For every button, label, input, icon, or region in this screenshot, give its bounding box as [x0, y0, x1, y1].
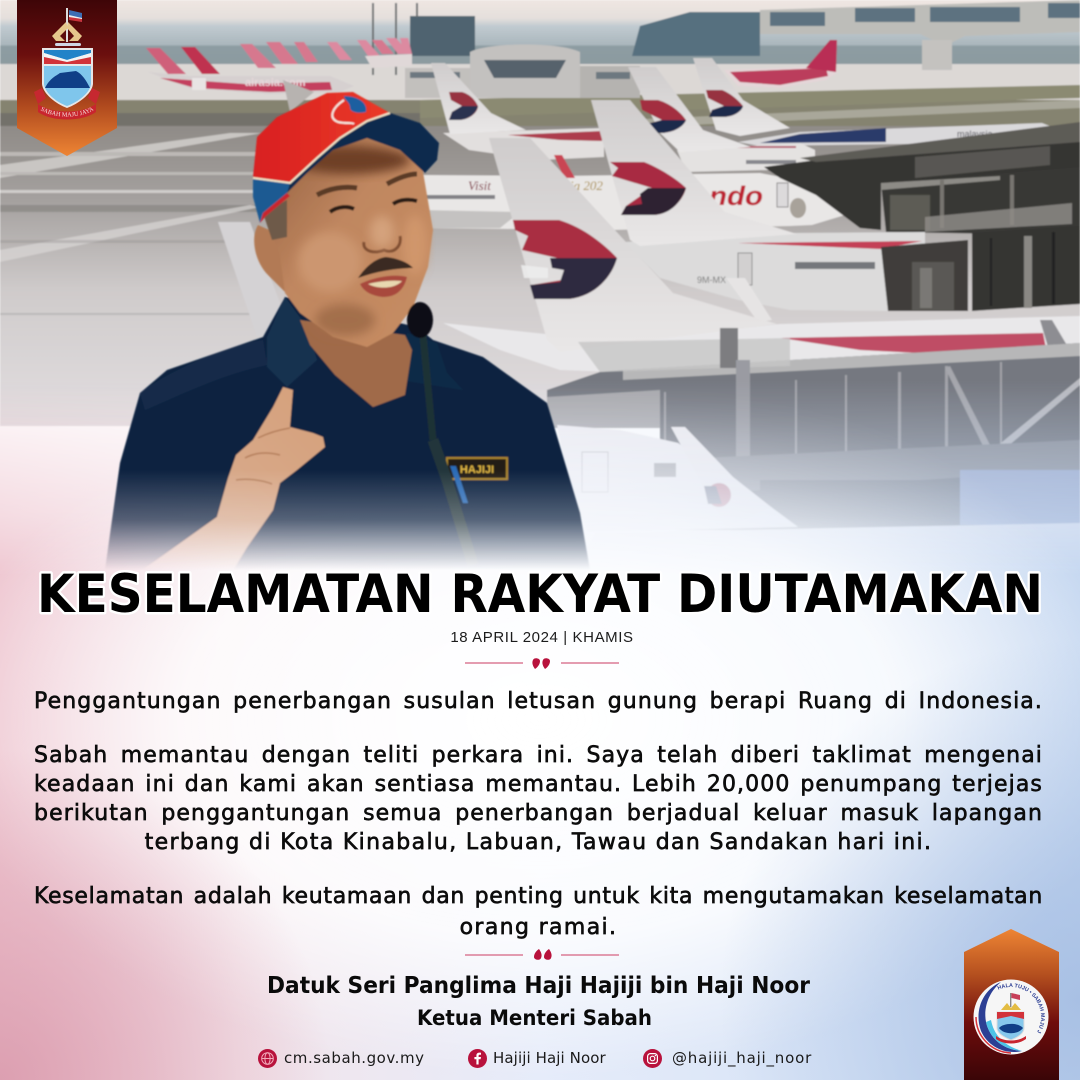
terminal buildings [372, 0, 1080, 98]
paragraph 2: terbang di Kota Kinabalu, Labuan, Tawau dan Sandakan hari ini. [145, 830, 932, 855]
footer: website: cm.sabah.gov.my [284, 1049, 425, 1067]
paragraph 3: Keselamatan adalah keutamaan dan penting untuk kita mengutamakan keselamatan [34, 884, 1043, 909]
shirt [105, 297, 590, 570]
central glow [0, 428, 1080, 1023]
plane C: malaysia [957, 129, 993, 139]
paragraph 2: berikutan penggantungan semua penerbangan berjadual keluar masuk lapangan [34, 801, 1043, 826]
plane E: 9M-MX [697, 275, 726, 285]
footer: instagram: @hajiji_haji_noor [672, 1049, 812, 1067]
speaker title: Ketua Menteri Sabah [417, 1006, 652, 1030]
plane D: Malindo and Visit Malaysia livery [420, 155, 853, 230]
neck [300, 320, 412, 407]
moustache and mouth [358, 257, 413, 278]
paragraph 2 [34, 743, 1043, 855]
paragraph 1: Penggantungan penerbangan susulan letusan gunung berapi Ruang di Indonesia. [34, 689, 1043, 714]
portrait: man with red cap speaking into microphone [106, 91, 589, 568]
bottom-left pink corner [0, 700, 380, 1080]
icon: facebook [468, 1049, 487, 1068]
paragraph 3: orang ramai. [460, 915, 617, 940]
cap logo [332, 96, 366, 124]
footer: facebook: Hajiji Haji Noor [493, 1049, 606, 1067]
plane D: Malindo and Visit Malaysia livery: ndo [709, 181, 763, 211]
divider with closing quote marks [465, 949, 619, 960]
bottom-right blue corner [680, 620, 1080, 1080]
ear [253, 224, 286, 292]
gradient wash over photo [0, 394, 1080, 1080]
divider with opening quote marks [465, 658, 619, 669]
jet bridges upper right [764, 122, 1080, 235]
icon: instagram [643, 1049, 662, 1068]
paragraph 3 [34, 884, 1043, 940]
body text [34, 689, 1043, 940]
distant airasia planes: airasia.com [245, 77, 306, 89]
lower plane [557, 425, 798, 532]
distant airasia planes [146, 38, 838, 94]
plane D: Malindo and Visit Malaysia livery: Visit [468, 178, 491, 193]
jet bridge cabin [881, 226, 1080, 311]
crest: shield [42, 48, 93, 108]
paragraph 2: Sabah memantau dengan teliti perkara ini. Saya telah diberi taklimat mengenai [34, 743, 1043, 768]
plane D: Malindo and Visit Malaysia livery: sia 202 [565, 178, 603, 193]
foreground wing band [574, 523, 1080, 575]
cap [253, 92, 439, 223]
plane F [443, 138, 1080, 375]
name badge [447, 458, 507, 479]
lower terminal and jet bridge [547, 328, 1080, 530]
date: 18 APRIL 2024 | KHAMIS [450, 629, 634, 646]
crest: motto ribbon [34, 88, 100, 120]
face [282, 136, 434, 348]
speaker name: Datuk Seri Panglima Haji Hajiji bin Haji Noor [267, 973, 811, 999]
crest: flag and crown [52, 8, 82, 46]
plane B [628, 67, 815, 172]
name badge: HAJIJI [460, 464, 494, 476]
icon: globe [258, 1049, 277, 1068]
logo badge: HALA TUJU • SABAH MAJU JAYA [997, 983, 1045, 1034]
hand [143, 387, 325, 570]
microphone [407, 302, 473, 565]
paragraph 2: keadaan ini dan kami akan sentiasa memantau. Lebih 20,000 penumpang terjejas [34, 772, 1043, 797]
plane E [591, 100, 925, 322]
crest: motto ribbon: SABAH MAJU JAYA [40, 107, 94, 117]
faded tails left of portrait [218, 222, 290, 337]
brows, eyes, nose [317, 187, 357, 195]
plane A [431, 63, 604, 160]
plane C [693, 58, 1060, 146]
